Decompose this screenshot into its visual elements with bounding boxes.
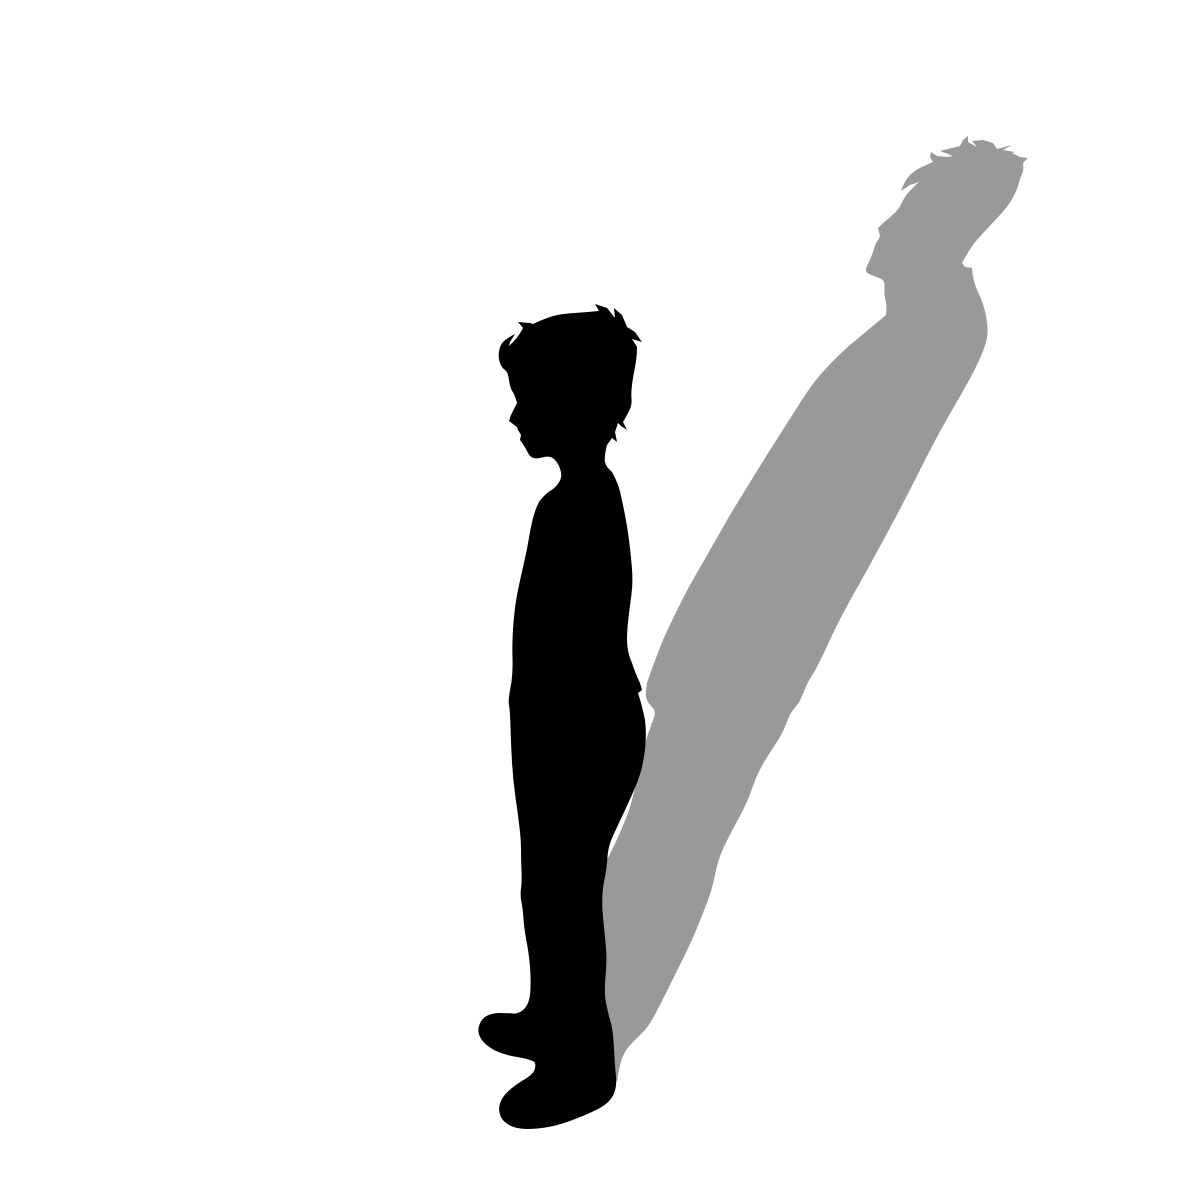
adult man shadow silhouette — [590, 136, 1028, 1082]
boy silhouette — [478, 304, 646, 1129]
